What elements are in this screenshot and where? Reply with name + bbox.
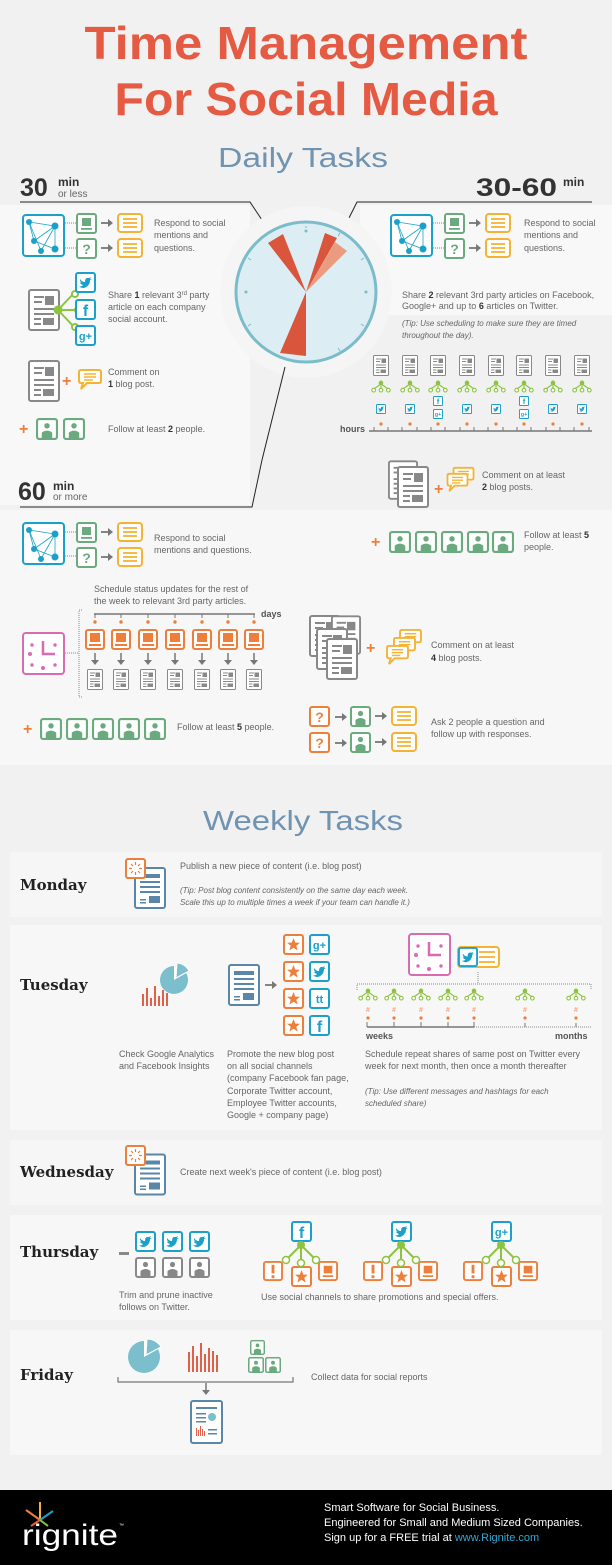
task: schedule status updates xyxy=(23,584,282,697)
task: schedule status updates: the week to relevant 3rd party articles. xyxy=(94,596,246,606)
task: follow 5 (60): + xyxy=(23,721,32,738)
task: share 1 article: social account. xyxy=(108,314,168,324)
Tuesday: # xyxy=(392,1007,396,1014)
task: follow 2: + xyxy=(19,421,28,438)
Monday xyxy=(20,859,410,908)
section header: 30 min or less: min xyxy=(58,175,79,189)
section header: 30 min or less xyxy=(20,174,262,220)
task: comment on 2 blog posts: Comment on at least xyxy=(482,470,566,480)
Tuesday: Corporate Twitter account, xyxy=(227,1086,332,1096)
task: follow 5 (60) xyxy=(23,719,274,739)
logo: rignite: ™ xyxy=(119,1523,124,1529)
task: schedule status updates: Schedule status updates for the rest of xyxy=(94,584,249,594)
heading: Daily Tasks: Daily Tasks xyxy=(218,142,388,173)
Tuesday: Google + company page) xyxy=(227,1110,328,1120)
task: follow 5 (60): Follow at least 5 people. xyxy=(177,722,274,732)
Thursday: Use social channels to share promotions and special offers. xyxy=(261,1292,498,1302)
timeline: hours: hours xyxy=(340,424,365,434)
Wednesday: Create next week's piece of content (i.e. blog post) xyxy=(180,1167,382,1177)
Tuesday: week for next month, then once a month thereafter xyxy=(364,1061,567,1071)
task: follow 2 xyxy=(19,419,205,439)
analytics icon xyxy=(142,963,189,1006)
task: comment on 2 blog posts: 2 blog posts. xyxy=(482,482,533,492)
task: follow 5 (30-60): people. xyxy=(524,542,554,552)
Thursday: Thursday xyxy=(20,1243,100,1261)
task: respond (30-60) xyxy=(391,214,596,258)
section header: 30-60 min: min xyxy=(563,175,584,189)
Monday: (Tip: Post blog content consistently on the same day each week. xyxy=(180,886,408,895)
task: comment on 1 blog post xyxy=(29,361,160,401)
task: comment on 4 blog posts: Comment on at least xyxy=(431,640,515,650)
title: For Social Media xyxy=(114,73,498,125)
section header: 60 min or more: 60 xyxy=(18,478,46,506)
Friday xyxy=(20,1339,428,1443)
Tuesday: # xyxy=(446,1007,450,1014)
task: follow 5 (30-60): Follow at least 5 xyxy=(524,530,589,540)
section header: 60 min or more: min xyxy=(53,479,74,493)
task: respond (30 min): mentions and xyxy=(154,230,208,240)
task: respond (30-60): questions. xyxy=(524,243,565,253)
task: share 2 and up to 6: Google+ and up to 6 articles on Twitter. xyxy=(402,301,558,311)
task: respond (30 min) xyxy=(23,214,226,258)
Tuesday: Employee Twitter accounts, xyxy=(227,1098,337,1108)
task: comment on 2 blog posts: + xyxy=(434,481,443,498)
Monday: Monday xyxy=(20,876,88,894)
Tuesday: # xyxy=(523,1007,527,1014)
Tuesday: # xyxy=(574,1007,578,1014)
section header: 30 min or less: 30 xyxy=(20,174,48,202)
task: schedule status updates: days xyxy=(261,609,282,619)
task: share 1 article: article on each company xyxy=(108,302,206,312)
timeline: hours xyxy=(340,356,592,434)
Tuesday: on all social channels xyxy=(227,1061,313,1071)
task: comment on 2 blog posts xyxy=(389,461,566,507)
task: respond (30 min): questions. xyxy=(154,243,195,253)
task: share 2 and up to 6 xyxy=(402,290,594,340)
Tuesday: # xyxy=(472,1007,476,1014)
task: ask 2 people: Ask 2 people a question and xyxy=(431,717,545,727)
task: follow 5 (30-60) xyxy=(371,530,589,552)
Monday: Publish a new piece of content (i.e. blog post) xyxy=(180,861,362,871)
task: share 1 article: party xyxy=(187,290,210,300)
task: respond (30 min): Respond to social xyxy=(154,218,226,228)
Tuesday: Schedule repeat shares of same post on Twitter every xyxy=(365,1049,580,1059)
heading: Weekly Tasks: Weekly Tasks xyxy=(203,805,403,836)
Tuesday: Check Google Analytics xyxy=(119,1049,215,1059)
task: respond (30-60): mentions and xyxy=(524,230,578,240)
task: share 1 article xyxy=(29,273,210,345)
Tuesday: scheduled share) xyxy=(365,1099,427,1108)
footer: Sign up for a FREE trial at www.Rignite.com xyxy=(324,1532,539,1544)
Tuesday: months xyxy=(555,1031,588,1041)
Tuesday: and Facebook Insights xyxy=(119,1061,210,1071)
task: comment on 1 blog post: 1 blog post. xyxy=(108,379,155,389)
Tuesday: Promote the new blog post xyxy=(227,1049,335,1059)
clock xyxy=(20,206,392,507)
task: ask 2 people xyxy=(310,707,545,752)
section header: 60 min or more xyxy=(18,478,88,506)
Thursday xyxy=(20,1222,537,1312)
task: comment on 1 blog post: Comment on xyxy=(108,367,160,377)
task: respond (60): mentions and questions. xyxy=(154,545,252,555)
Tuesday: weeks xyxy=(365,1031,393,1041)
footer xyxy=(0,1490,612,1565)
Friday: Collect data for social reports xyxy=(311,1372,428,1382)
task: comment on 4 blog posts: + xyxy=(366,640,375,657)
Monday: Scale this up to multiple times a week if your team can handle it.) xyxy=(180,898,410,907)
title xyxy=(84,17,528,125)
task: share 1 article: Share 1 relevant 3 xyxy=(108,290,182,300)
Thursday: follows on Twitter. xyxy=(119,1302,190,1312)
section header: 30-60 min xyxy=(348,174,592,220)
Wednesday: Wednesday xyxy=(19,1163,115,1181)
Tuesday: # xyxy=(366,1007,370,1014)
task: share 2 and up to 6: (Tip: Use scheduling to make sure they are timed xyxy=(402,319,577,328)
Wednesday xyxy=(19,1146,382,1194)
task: share 2 and up to 6: Share 2 relevant 3rd party articles on Facebook, xyxy=(402,290,594,300)
task: ask 2 people: follow up with responses. xyxy=(431,729,532,739)
task: respond (30-60): Respond to social xyxy=(524,218,596,228)
title: Time Management xyxy=(84,17,528,69)
task: share 2 and up to 6: throughout the day). xyxy=(402,331,474,340)
task: comment on 1 blog post: + xyxy=(62,373,71,390)
task: follow 5 (30-60): + xyxy=(371,534,380,551)
section header: 30-60 min: 30-60 xyxy=(476,174,557,202)
Tuesday: (Tip: Use different messages and hashtags for each xyxy=(365,1087,549,1096)
task: respond (60) xyxy=(23,523,252,567)
section header: 30 min or less: or less xyxy=(58,189,87,200)
task: share 1 article: rd xyxy=(182,291,187,297)
logo: rignite: rignite xyxy=(22,1519,118,1552)
task: comment on 4 blog posts xyxy=(310,616,515,679)
task: follow 2: Follow at least 2 people. xyxy=(108,424,205,434)
footer: Engineered for Small and Medium Sized Companies. xyxy=(324,1517,583,1529)
section header: 60 min or more: or more xyxy=(53,492,88,503)
Thursday: Trim and prune inactive xyxy=(119,1290,213,1300)
Tuesday: Tuesday xyxy=(20,976,89,994)
Tuesday: (company Facebook fan page, xyxy=(227,1073,349,1083)
task: respond (60): Respond to social xyxy=(154,533,226,543)
logo: rignite xyxy=(22,1502,124,1552)
Friday: Friday xyxy=(20,1366,74,1384)
task: comment on 4 blog posts: 4 blog posts. xyxy=(431,653,482,663)
footer: Smart Software for Social Business. xyxy=(324,1502,499,1514)
Tuesday: # xyxy=(419,1007,423,1014)
Tuesday xyxy=(20,934,591,1120)
